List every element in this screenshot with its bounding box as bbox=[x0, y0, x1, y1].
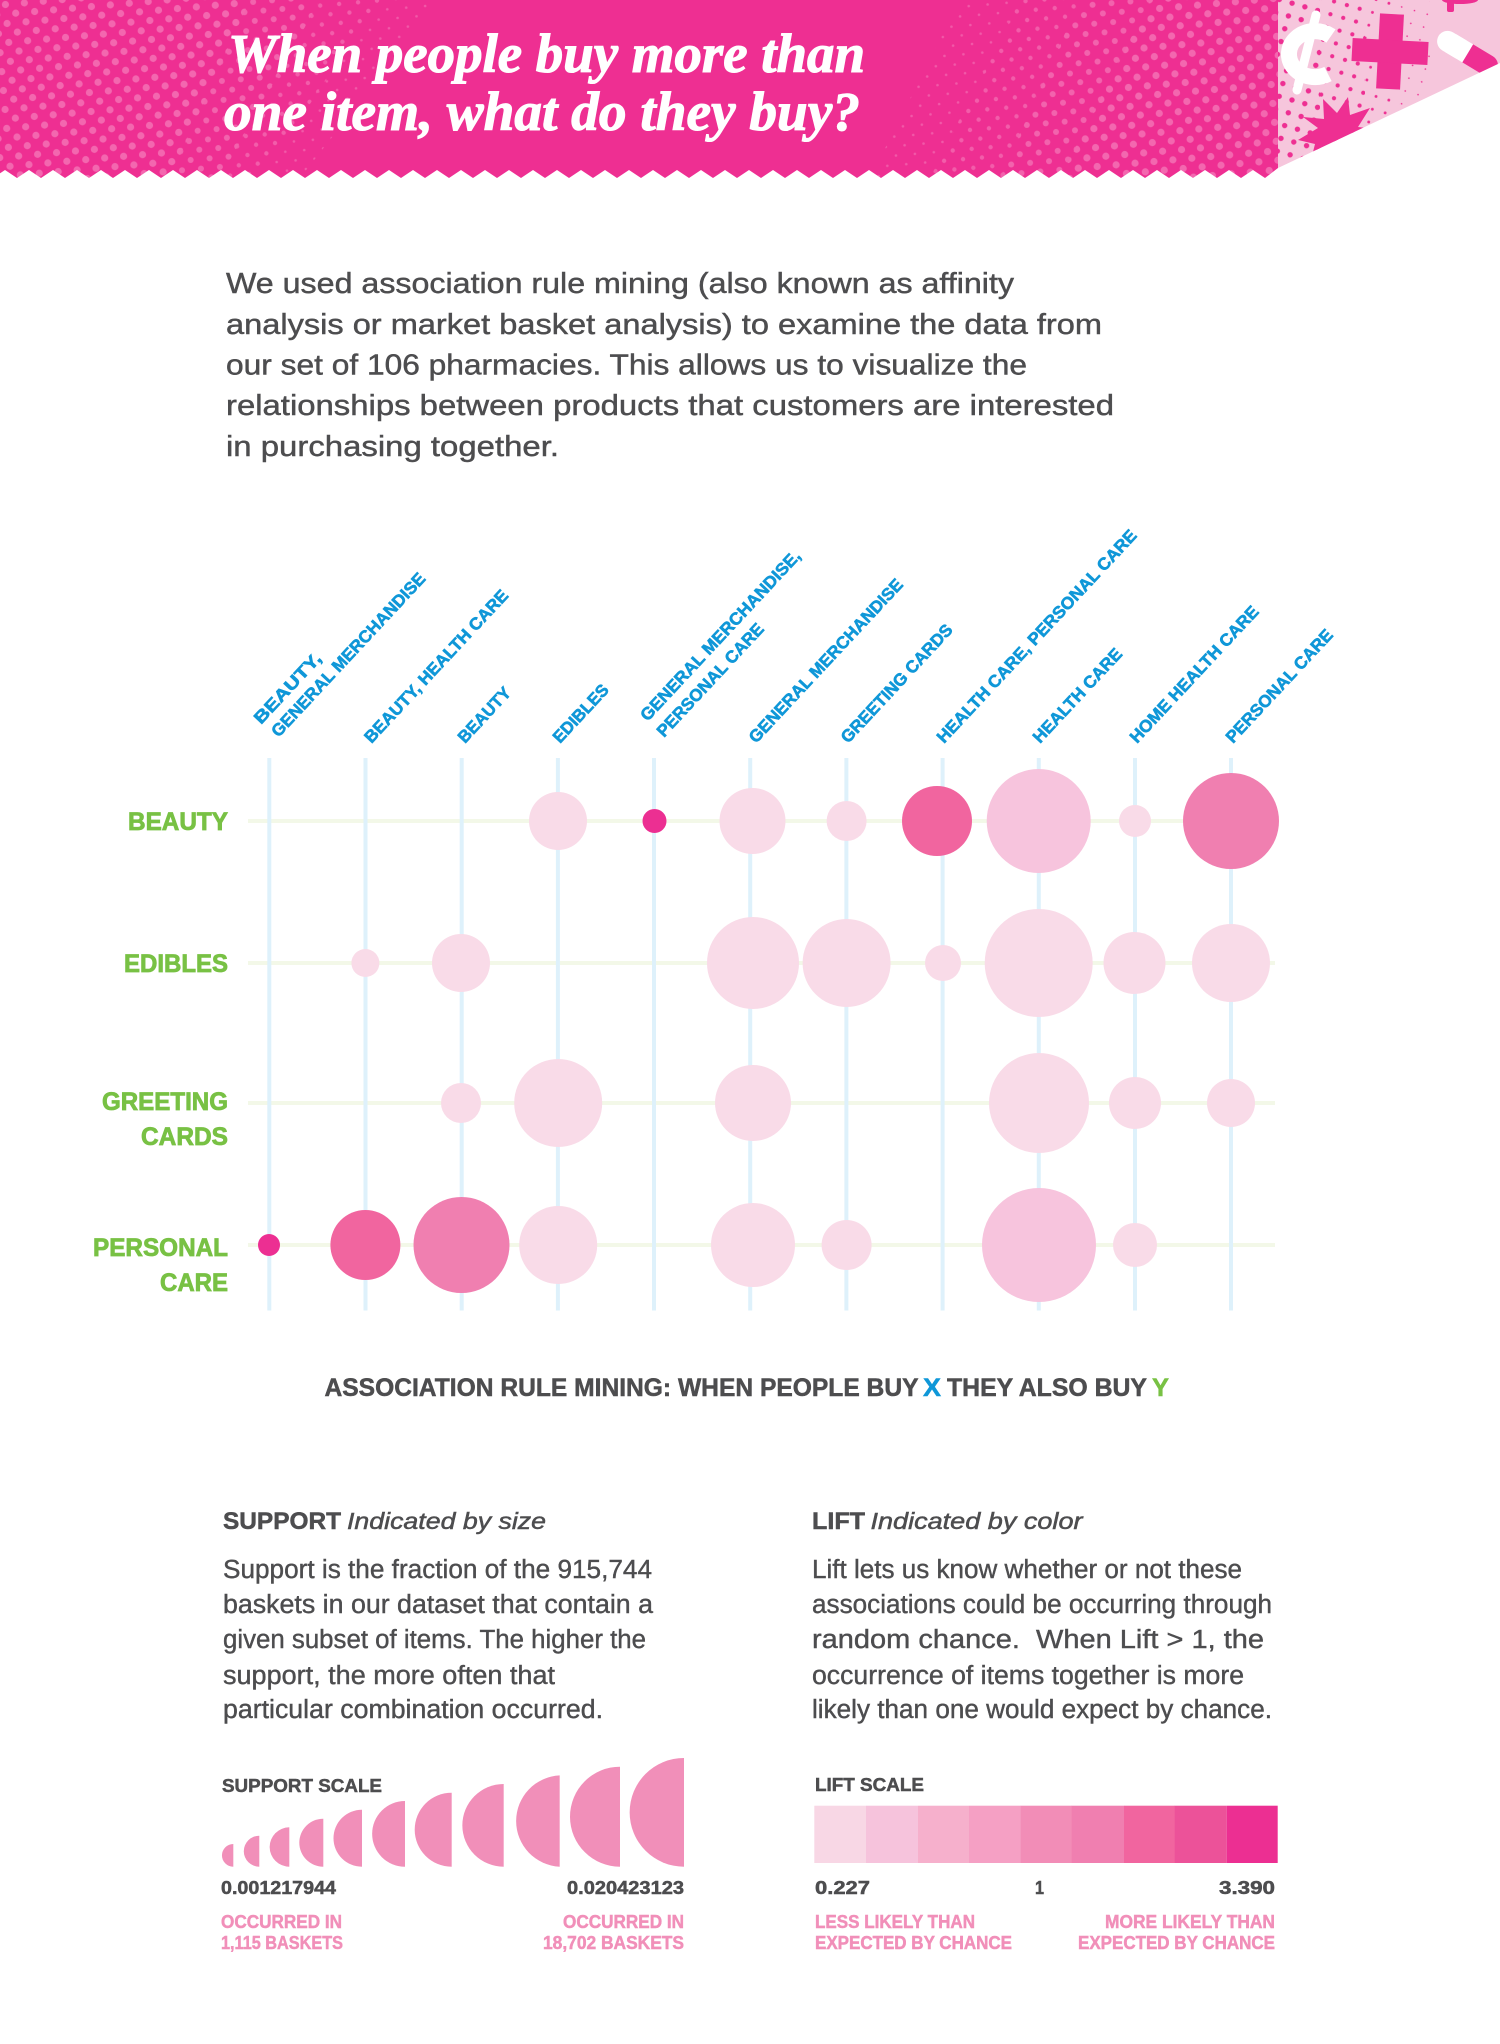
lift scale notes: LESS LIKELY THAN bbox=[815, 1911, 975, 1932]
support heading bbox=[223, 1508, 546, 1535]
column labels: PERSONAL CARE bbox=[653, 620, 768, 741]
row labels: EDIBLES bbox=[124, 950, 228, 978]
support description: particular combination occurred. bbox=[223, 1696, 603, 1724]
bubbles row: greeting cards bbox=[441, 1053, 1255, 1153]
title: one item, what do they buy? bbox=[224, 81, 860, 142]
lift colour bar bbox=[814, 1806, 1278, 1863]
support scale title: SUPPORT SCALE bbox=[222, 1775, 382, 1796]
chart caption: THEY ALSO BUY bbox=[947, 1374, 1147, 1402]
lift description: associations could be occurring through bbox=[812, 1591, 1272, 1619]
lift scale notes: MORE LIKELY THAN bbox=[1105, 1911, 1275, 1932]
support heading: SUPPORT bbox=[223, 1508, 341, 1535]
bubbles row: personal care bbox=[258, 1188, 1157, 1302]
header banner bbox=[0, 0, 1500, 178]
support scale notes: 1,115 BASKETS bbox=[221, 1932, 343, 1953]
lift scale notes: EXPECTED BY CHANCE bbox=[815, 1932, 1012, 1953]
lift section bbox=[812, 1508, 1278, 1953]
lift description bbox=[812, 1556, 1272, 1724]
support scale half circles bbox=[222, 1758, 684, 1867]
intro paragraph: analysis or market basket analysis) to examine the data from bbox=[226, 309, 1102, 341]
support description: support, the more often that bbox=[223, 1662, 555, 1690]
title: When people buy more than bbox=[228, 23, 865, 84]
column labels: HEALTH CARE, PERSONAL CARE bbox=[933, 526, 1141, 747]
row labels: BEAUTY bbox=[128, 808, 228, 836]
row labels bbox=[93, 808, 228, 1297]
support description bbox=[223, 1556, 654, 1724]
lift scale notes bbox=[815, 1911, 1275, 1953]
support scale values bbox=[221, 1877, 684, 1898]
lift heading bbox=[812, 1508, 1084, 1535]
lift description: occurrence of items together is more bbox=[812, 1662, 1244, 1690]
intro paragraph: our set of 106 pharmacies. This allows us to visualize the bbox=[226, 350, 1027, 382]
lift scale title: LIFT SCALE bbox=[815, 1774, 924, 1795]
bubbles row: edibles bbox=[351, 909, 1270, 1017]
support scale notes: OCCURRED IN bbox=[563, 1911, 684, 1932]
folded corner with icons bbox=[1278, 0, 1500, 178]
column labels: HOME HEALTH CARE bbox=[1126, 602, 1263, 747]
column labels: BEAUTY bbox=[454, 683, 515, 747]
lift scale notes: EXPECTED BY CHANCE bbox=[1078, 1932, 1275, 1953]
row labels: CARE bbox=[160, 1269, 228, 1297]
support scale values: 0.001217944 bbox=[221, 1877, 337, 1898]
intro paragraph bbox=[226, 268, 1114, 463]
intro paragraph: relationships between products that customers are interested bbox=[226, 390, 1114, 422]
pink background with halftone dots bbox=[0, 0, 1278, 178]
column labels: PERSONAL CARE bbox=[1222, 626, 1337, 747]
lift description: random chance. When Lift > 1, the bbox=[812, 1626, 1264, 1654]
row labels: PERSONAL bbox=[93, 1234, 228, 1262]
title bbox=[224, 23, 865, 142]
support section bbox=[221, 1508, 684, 1953]
intro paragraph: We used association rule mining (also known as affinity bbox=[226, 268, 1015, 300]
lift heading: Indicated by color bbox=[870, 1508, 1084, 1534]
support description: given subset of items. The higher the bbox=[223, 1626, 646, 1654]
column labels: GREETING CARDS bbox=[837, 620, 957, 747]
icon: cent sign bbox=[1289, 15, 1331, 90]
lift scale values: 1 bbox=[1035, 1877, 1044, 1898]
lift heading: LIFT bbox=[812, 1508, 865, 1535]
lift scale values: 3.390 bbox=[1219, 1877, 1275, 1898]
chart caption: Y bbox=[1152, 1374, 1169, 1402]
icon: partial cross at top bbox=[1442, 0, 1478, 12]
column labels: GENERAL MERCHANDISE bbox=[745, 575, 907, 747]
support scale values: 0.020423123 bbox=[567, 1877, 684, 1898]
column labels bbox=[250, 526, 1337, 747]
column labels: GENERAL MERCHANDISE bbox=[268, 569, 429, 741]
lift description: Lift lets us know whether or not these bbox=[812, 1556, 1242, 1584]
column labels: BEAUTY, HEALTH CARE bbox=[361, 586, 512, 747]
icon: plus cross bbox=[1350, 12, 1430, 91]
bubble matrix chart bbox=[93, 526, 1337, 1310]
support scale notes: 18,702 BASKETS bbox=[543, 1932, 684, 1953]
intro paragraph: in purchasing together. bbox=[226, 431, 559, 463]
icon: pill bbox=[1437, 30, 1498, 73]
chart caption: X bbox=[923, 1374, 941, 1402]
bubbles row: beauty bbox=[529, 769, 1279, 873]
column labels: EDIBLES bbox=[549, 680, 613, 747]
support heading: Indicated by size bbox=[347, 1508, 546, 1534]
row labels: GREETING bbox=[102, 1088, 228, 1116]
lift description: likely than one would expect by chance. bbox=[812, 1696, 1272, 1724]
icon: starburst bbox=[1298, 97, 1370, 152]
support scale notes bbox=[221, 1911, 684, 1953]
chart caption: ASSOCIATION RULE MINING: WHEN PEOPLE BUY bbox=[324, 1374, 919, 1402]
column labels: BEAUTY, bbox=[250, 649, 325, 728]
lift scale values: 0.227 bbox=[815, 1877, 870, 1898]
column labels: GENERAL MERCHANDISE, bbox=[637, 546, 805, 725]
lift scale values bbox=[815, 1877, 1275, 1898]
support description: Support is the fraction of the 915,744 bbox=[223, 1556, 652, 1584]
column labels: HEALTH CARE bbox=[1029, 645, 1126, 747]
support description: baskets in our dataset that contain a bbox=[223, 1591, 654, 1619]
support scale notes: OCCURRED IN bbox=[221, 1911, 342, 1932]
row labels: CARDS bbox=[141, 1123, 228, 1151]
